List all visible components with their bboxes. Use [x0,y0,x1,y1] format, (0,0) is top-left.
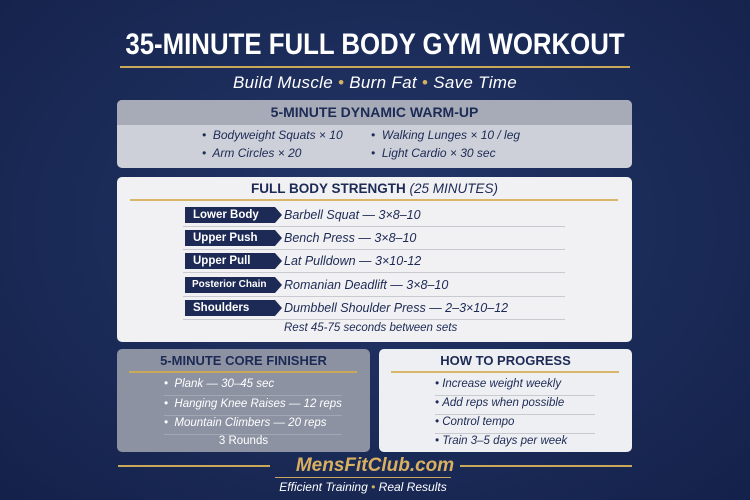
progress header: HOW TO PROGRESS [440,353,571,368]
warm-up header [117,100,632,125]
warm-up header: 5-MINUTE DYNAMIC WARM-UP [271,104,478,120]
row: upper pull: Upper Pull [193,255,251,267]
footer gold lines [118,465,270,467]
progress list: • Control tempo [435,416,514,428]
row: lower body: Lower Body [193,209,259,221]
row: posterior chain: Romanian Deadlift — 3×8–10 [284,278,448,292]
row: posterior chain [183,275,565,297]
footer brand: MensFitClub.com [296,455,454,476]
row: lower body: Barbell Squat — 3×8–10 [284,208,421,222]
exercise rows [183,207,565,334]
row: shoulders: Shoulders [193,302,249,314]
footer tagline: Efficient Training • Real Results [279,480,447,494]
subtitle: Build Muscle • Burn Fat • Save Time [233,73,517,92]
panel: full body strength [117,177,632,342]
progress list: • Train 3–5 days per week [435,435,567,447]
core list: 3 Rounds [219,435,268,447]
row: upper push: Upper Push [193,232,258,244]
panel: how to progress [379,349,632,452]
row: upper pull [183,251,565,273]
progress list: • Increase weight weekly [435,378,561,390]
warm-up list: • Bodyweight Squats × 10 [202,128,343,142]
warm-up list [202,128,520,160]
row: shoulders [183,298,565,320]
core list: • Plank — 30–45 sec [164,378,274,390]
core list: • Hanging Knee Raises — 12 reps [164,398,342,410]
core header: 5-MINUTE CORE FINISHER [160,353,327,368]
rest note: Rest 45-75 seconds between sets [284,322,457,334]
panel: core finisher [117,349,370,452]
progress list [435,378,595,447]
warm-up list: • Arm Circles × 20 [202,146,301,160]
row: upper push: Bench Press — 3×8–10 [284,231,416,245]
warm-up list: • Walking Lunges × 10 / leg [371,128,520,142]
core list: • Mountain Climbers — 20 reps [164,417,327,429]
warm-up list: • Light Cardio × 30 sec [371,146,496,160]
row: posterior chain: Posterior Chain [192,279,266,290]
panel: warm-up [117,100,632,168]
row: upper push [183,228,565,250]
row: lower body [183,205,565,227]
strength header: FULL BODY STRENGTH (25 MINUTES) [251,181,498,196]
progress list: • Add reps when possible [435,397,564,409]
core list [164,378,342,447]
row: upper pull: Lat Pulldown — 3×10-12 [284,254,421,268]
title: 35-MINUTE FULL BODY GYM WORKOUT [125,28,625,61]
gold rule under title [120,66,630,68]
row: shoulders: Dumbbell Shoulder Press — 2–3×10–12 [284,301,508,315]
